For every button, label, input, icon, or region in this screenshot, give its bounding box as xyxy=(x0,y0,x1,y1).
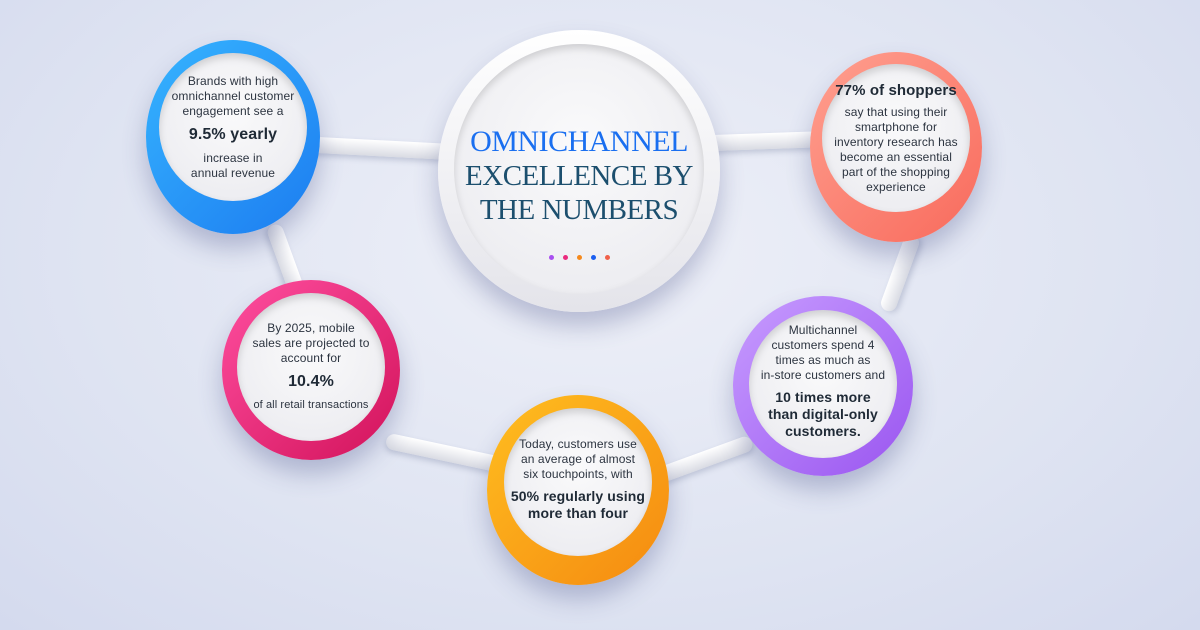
stat: pink: of all retail transactions xyxy=(253,399,369,411)
stat: purple: times as much as xyxy=(776,352,870,366)
title: OMNICHANNEL xyxy=(470,125,688,158)
connector: pink to orange xyxy=(385,433,505,473)
stat: blue: Brands with high xyxy=(188,74,278,88)
stat: pink xyxy=(222,280,400,460)
stat: purple: in-store customers and xyxy=(761,368,885,382)
stat: red: become an essential xyxy=(840,150,952,164)
title xyxy=(465,125,693,226)
stat: orange: Today, customers use xyxy=(519,436,637,450)
stat: red: inventory research has xyxy=(834,135,958,149)
stat: pink: 10.4% xyxy=(288,373,334,390)
stat: blue: omnichannel customer xyxy=(172,88,294,102)
connector: blue to pink xyxy=(266,222,304,294)
stat: purple xyxy=(733,296,913,476)
stat: purple: customers spend 4 xyxy=(771,338,875,352)
stat: red: 77% of shoppers xyxy=(835,82,957,99)
stat: blue: 9.5% yearly xyxy=(189,126,277,142)
central title circle xyxy=(438,30,720,312)
dots xyxy=(549,255,610,260)
stat: purple: 10 times more xyxy=(775,388,871,404)
stat: blue: engagement see a increase in xyxy=(182,104,284,164)
stat: red xyxy=(810,52,982,242)
title: THE NUMBERS xyxy=(480,194,678,226)
connector: center to red xyxy=(705,131,835,151)
stat: red: experience xyxy=(866,180,926,194)
stat: blue xyxy=(146,40,320,234)
stat: purple: Multichannel xyxy=(789,322,857,336)
stat: red: smartphone for xyxy=(855,120,937,134)
title: EXCELLENCE BY xyxy=(465,160,693,192)
stat: red: part of the shopping xyxy=(842,165,950,179)
connector: blue to center xyxy=(300,136,450,160)
stat: orange: an average of almost xyxy=(521,452,635,466)
stat: orange: 50% regularly using xyxy=(511,488,645,504)
stat: pink: account for xyxy=(281,351,341,365)
stat: blue: annual revenue xyxy=(191,166,275,180)
stat: purple: than digital-only xyxy=(768,406,878,422)
connector: purple to red xyxy=(879,233,921,313)
connector: orange to purple xyxy=(650,435,755,485)
stat: pink: By 2025, mobile xyxy=(267,321,355,335)
stat: orange: six touchpoints, with xyxy=(523,466,633,480)
stat: orange: more than four xyxy=(528,504,628,520)
stat: pink: sales are projected to xyxy=(253,336,369,350)
stat: red: say that using their xyxy=(845,105,947,119)
stat: purple: customers. xyxy=(785,422,861,438)
stat: orange xyxy=(487,395,669,585)
